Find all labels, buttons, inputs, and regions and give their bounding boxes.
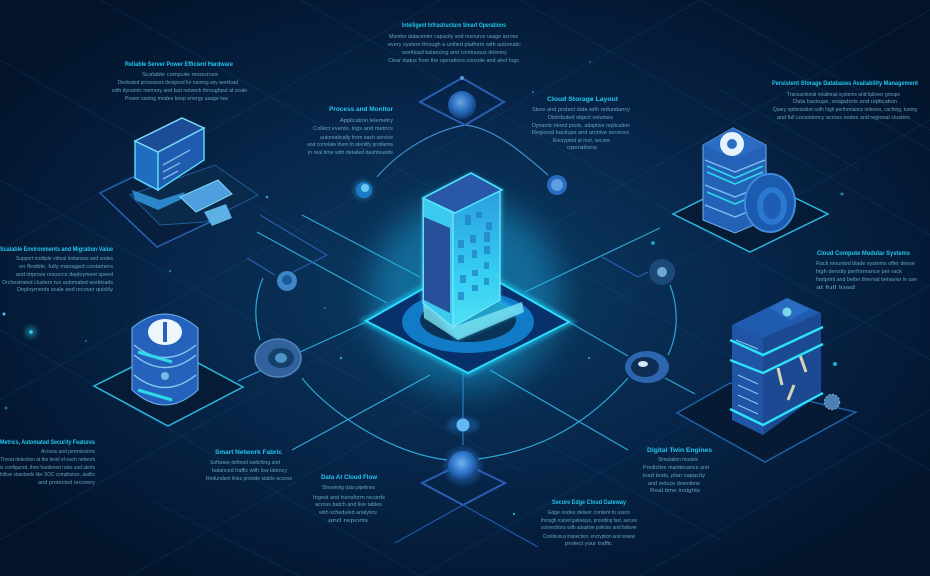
text block: upper right: and full consistency across nodes and regional clusters bbox=[777, 115, 910, 121]
text block: lower left: and protected recovery bbox=[38, 480, 95, 486]
background stars bbox=[2, 61, 844, 515]
text block: bottom centre left: and reports bbox=[328, 518, 368, 524]
platform bbox=[673, 176, 828, 252]
node: right ring bbox=[625, 351, 669, 383]
text block: bottom centre right bbox=[541, 499, 637, 547]
node: lower centre bbox=[447, 417, 479, 433]
platform bbox=[366, 264, 569, 373]
text block: bottom left: Redundant links provide stable access bbox=[206, 476, 292, 482]
text block: inner right: Distributed object volumes bbox=[548, 115, 613, 121]
text block: upper left: Dedicated processors designed for running any workload bbox=[118, 80, 238, 86]
text block: top centre: Intelligent Infrastructure Smart Operations bbox=[402, 22, 506, 29]
text block: lower left: Metrics, Automated Security Features bbox=[0, 439, 95, 446]
node: upper left bbox=[353, 180, 373, 200]
text block: left middle bbox=[0, 246, 113, 293]
text block: upper right bbox=[772, 80, 918, 121]
base machinery bbox=[130, 165, 258, 225]
node: left outer bbox=[277, 271, 297, 291]
text block: right middle bbox=[816, 250, 917, 291]
text block: bottom centre right: Continuous inspection, encryption and review bbox=[543, 534, 636, 540]
gear bbox=[824, 394, 840, 410]
text block: lower right bbox=[643, 447, 713, 494]
text block: left middle: Support multiple virtual instances and nodes bbox=[16, 256, 113, 262]
text block: lower left bbox=[0, 439, 95, 486]
text block: lower left: Threat detection at the level of each network bbox=[0, 457, 95, 463]
text block: lower left: is configured, then hardened rules and alerts bbox=[0, 465, 95, 471]
text block: inner right: Cloud Storage Layout bbox=[547, 96, 618, 103]
cyan light bands bbox=[730, 327, 823, 425]
database stack bbox=[703, 128, 766, 233]
text block: upper left: with dynamic memory and fast network throughput at scale bbox=[111, 88, 247, 94]
text block: right middle: Rack mounted blade systems offer dense bbox=[816, 261, 915, 267]
text block: upper right: Data backups, snapshots and replication bbox=[793, 99, 897, 105]
text block: lower left: follow standards like SOC compliance, audits bbox=[0, 472, 95, 478]
text block: bottom centre right: Edge nodes deliver content to users bbox=[548, 510, 630, 516]
text block: bottom centre right: Secure Edge Cloud Gateway bbox=[552, 499, 626, 506]
text block: right middle: footprint and better thermal behavior in use bbox=[816, 277, 917, 283]
text block: bottom centre right: protect your traffic bbox=[565, 541, 612, 547]
platform bbox=[100, 177, 210, 247]
text block: upper right: Transactional relational systems and failover groups bbox=[787, 92, 900, 98]
text block: bottom left: balanced traffic with low latency bbox=[212, 468, 287, 474]
text block: bottom left: Software defined switching and bbox=[210, 460, 280, 466]
panel: lower-right server rack bbox=[677, 298, 856, 462]
text block: bottom centre left: across batch and live tables bbox=[315, 502, 382, 508]
node: upper right bbox=[547, 175, 567, 195]
text block: inner left: Collect events, logs and metrics bbox=[313, 126, 393, 132]
text block: inner left: automatically from each service bbox=[320, 135, 393, 141]
text block: inner right: Dynamic tiered pools, adaptive replication bbox=[532, 123, 630, 129]
top diamond with globe bbox=[420, 76, 504, 125]
text block: right middle: high density performance per rack bbox=[816, 269, 902, 275]
logo bbox=[148, 319, 182, 345]
text block: left middle: and improve resource deployment speed bbox=[16, 272, 113, 278]
text block: lower right: Predictive maintenance and bbox=[643, 465, 709, 471]
monitor box bbox=[135, 141, 158, 190]
text block: inner right: Encrypted at rest, secure bbox=[553, 138, 610, 144]
camera lens bbox=[745, 174, 795, 232]
text block: top centre: Monitor datacenter capacity and resource usage across bbox=[389, 34, 518, 40]
platform bbox=[677, 383, 856, 462]
text block: right middle: Cloud Compute Modular Systems bbox=[817, 250, 911, 257]
text block: right middle: at full load bbox=[816, 285, 855, 291]
text block: inner right: operations bbox=[567, 145, 597, 151]
text block: bottom centre left bbox=[313, 474, 385, 524]
logo bbox=[720, 132, 744, 156]
text block: inner left: and correlate them to identify problems bbox=[307, 142, 393, 148]
text block: lower right: Simulation models bbox=[658, 457, 698, 463]
text block: upper left: Reliable Server Power Efficient Hardware bbox=[125, 61, 233, 68]
text block: upper right: Persistent Storage Databases Availability Management bbox=[772, 80, 918, 87]
text block: top centre bbox=[388, 22, 521, 64]
node icons on the rings bbox=[255, 175, 675, 433]
text block: upper left bbox=[111, 61, 247, 102]
text block: inner left: in real time with detailed dashboards bbox=[308, 150, 393, 156]
text block: bottom centre left: with scheduled analytics bbox=[318, 510, 377, 516]
text block: lower right: and reduce downtime bbox=[648, 481, 700, 487]
text block: lower right: Digital Twin Engines bbox=[647, 447, 713, 454]
panel: left database bbox=[94, 314, 243, 426]
text block: bottom centre right: through routed gateways, providing fast, secure bbox=[541, 518, 637, 524]
database stack bbox=[132, 314, 198, 405]
connection lines and orbit rings bbox=[238, 125, 695, 460]
node: left ring bbox=[255, 339, 301, 377]
text block: left middle: Deployments scale and recover quickly bbox=[17, 287, 113, 293]
text block: inner left bbox=[307, 106, 394, 156]
text block: inner left: Process and Monitor bbox=[329, 106, 394, 113]
text block: bottom centre right: connections with adaptive policies and failover bbox=[541, 525, 637, 531]
text block: bottom left: Smart Network Fabric bbox=[215, 449, 283, 456]
text block: left middle: Orchestrated clusters run automated workloads bbox=[2, 280, 113, 286]
text block: top centre: Clear status from the operations console and alert logs bbox=[388, 58, 519, 64]
panel: top-right database with lens bbox=[673, 128, 828, 252]
text block: top centre: every system through a unified platform with automatic bbox=[388, 42, 521, 48]
text block: left middle: on flexible, fully managed containers bbox=[19, 264, 113, 270]
tower bbox=[422, 173, 524, 340]
text block: inner left: Application telemetry bbox=[340, 118, 393, 124]
rack faces bbox=[732, 325, 763, 435]
text block: inner right: Store and protect data with redundancy bbox=[532, 107, 630, 113]
platform bbox=[94, 348, 243, 426]
node: right upper bbox=[649, 259, 675, 285]
text block: inner right: Regional backups and archive services bbox=[532, 130, 629, 136]
text block: lower left: Access and permissions bbox=[41, 449, 95, 455]
text block: lower right: load tests, plan capacity bbox=[643, 473, 705, 479]
text block: upper left: Scalable compute resources bbox=[142, 72, 218, 78]
text block: bottom centre left: Streaming data pipelines bbox=[322, 485, 375, 491]
text block: bottom centre left: Ingest and transform records bbox=[313, 495, 385, 501]
text block: top centre: workload balancing and continuous delivery bbox=[401, 50, 507, 56]
text block: bottom left bbox=[206, 449, 292, 482]
text block: upper left: Power saving modes keep energy usage low bbox=[125, 96, 229, 102]
bottom diamond with globe bbox=[395, 447, 538, 547]
text block: inner right bbox=[532, 96, 630, 151]
text block: lower right: Real time insights bbox=[650, 488, 700, 494]
text block: bottom centre left: Data At Cloud Flow bbox=[321, 474, 377, 481]
text block: left middle: Scalable Environments and Migration Value bbox=[0, 246, 113, 253]
central platform and server tower bbox=[366, 173, 569, 390]
tower glow bbox=[370, 200, 560, 390]
panel: top-left server bbox=[100, 118, 258, 247]
